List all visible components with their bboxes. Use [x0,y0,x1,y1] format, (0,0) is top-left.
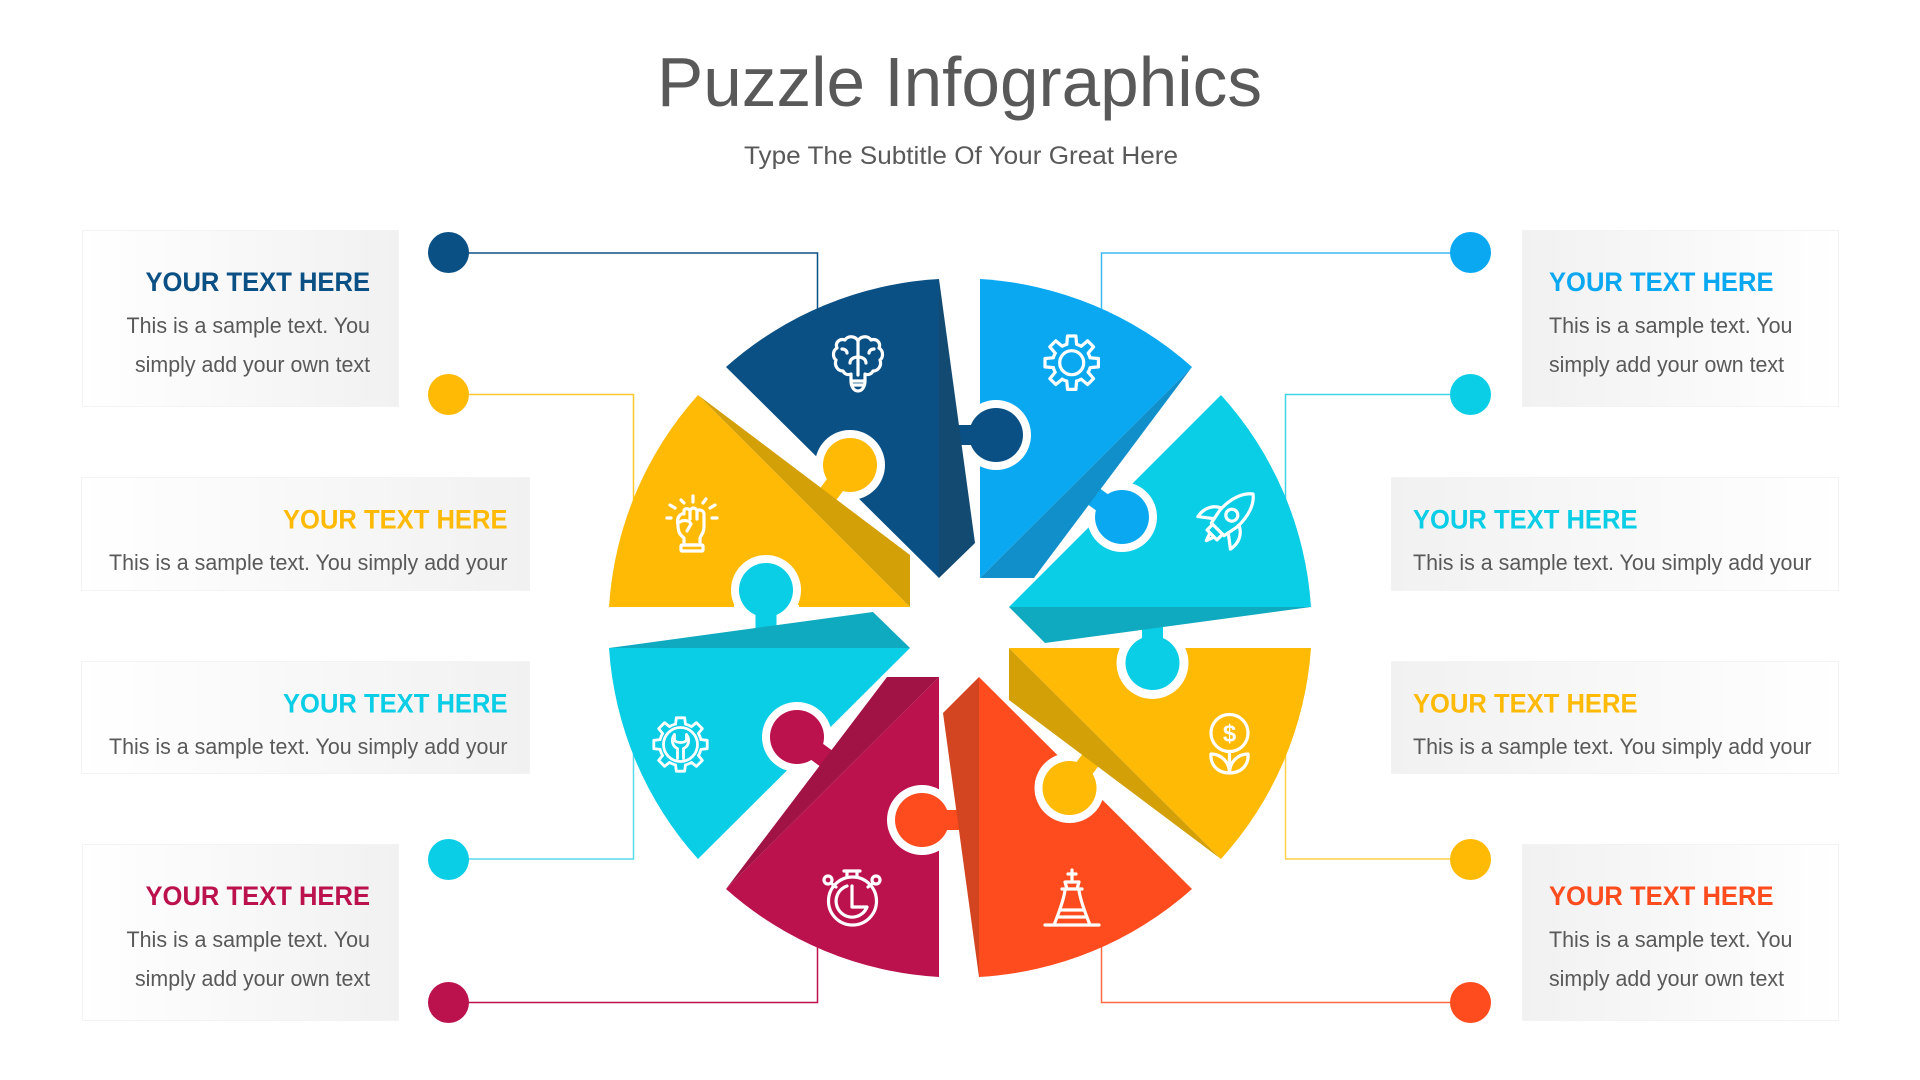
panel: text box navy: YOUR TEXT HERE [146,267,370,297]
panel: text box cyan right: This is a sample text. You simply add your [1413,550,1812,575]
panel: text box cyan right [1392,478,1838,590]
panel: text box crimson [82,844,398,1020]
puzzle wheel [609,279,1311,977]
panel: text box crimson: This is a sample text. You [126,927,370,952]
connector crimson [428,930,818,1023]
panel: text box blue: simply add your own text [1549,352,1784,377]
panel: text box yellow right [1392,662,1838,774]
panel: text box blue: YOUR TEXT HERE [1549,267,1774,297]
panel: text box orange: YOUR TEXT HERE [1549,881,1774,911]
panel: text box navy [82,230,398,406]
icon: coin plant [1211,714,1248,773]
icon: rocket [1190,477,1270,557]
connector cyan left [428,745,634,880]
panel: text box yellow left: This is a sample text. You simply add your [109,550,508,575]
icon: coin plant: $ [1223,720,1237,748]
panel: text box orange: simply add your own text [1549,966,1784,991]
icon: chess king [1045,870,1099,925]
connector yellow left [428,374,634,510]
panel: text box yellow right: YOUR TEXT HERE [1413,688,1638,718]
panel: text box cyan left: YOUR TEXT HERE [283,688,508,718]
panel: text box crimson: YOUR TEXT HERE [146,881,370,911]
icon: gear with wrench [654,718,707,771]
connector cyan right [1286,374,1491,510]
panel: text box yellow left: YOUR TEXT HERE [283,504,508,534]
panel: text box yellow right: This is a sample text. You simply add your [1413,734,1812,759]
panel: text box crimson: simply add your own text [135,966,370,991]
icon: gear [1045,336,1098,389]
panel: text box cyan left [82,662,530,774]
icon: stopwatch [824,871,880,925]
connector orange [1102,930,1491,1023]
panel: text box navy: simply add your own text [135,352,370,377]
title: Puzzle Infographics [657,43,1262,121]
piece: crimson [726,677,968,977]
panel: text box orange [1522,844,1838,1020]
connector navy [428,232,818,320]
panel: text box orange: This is a sample text. You [1549,927,1792,952]
piece: orange [979,677,1192,977]
icon: brain [834,337,882,391]
panel: text box cyan right: YOUR TEXT HERE [1413,504,1638,534]
connector yellow right [1286,745,1491,880]
piece: cyan right [1009,395,1311,607]
piece: yellow right [1009,615,1311,859]
icon: fist [667,496,717,551]
panel: text box blue: This is a sample text. You [1549,313,1792,338]
connector blue [1102,232,1491,320]
piece: blue [950,279,1192,578]
shaded folds [609,279,1311,977]
piece: cyan left [609,648,910,859]
panel: text box yellow left [82,478,530,590]
piece: yellow left [609,395,910,640]
panel: text box blue [1522,230,1838,406]
subtitle: Type The Subtitle Of Your Great Here [744,142,1178,170]
piece: navy [726,279,939,578]
panel: text box navy: This is a sample text. You [126,313,370,338]
panel: text box cyan left: This is a sample text. You simply add your [109,734,508,759]
